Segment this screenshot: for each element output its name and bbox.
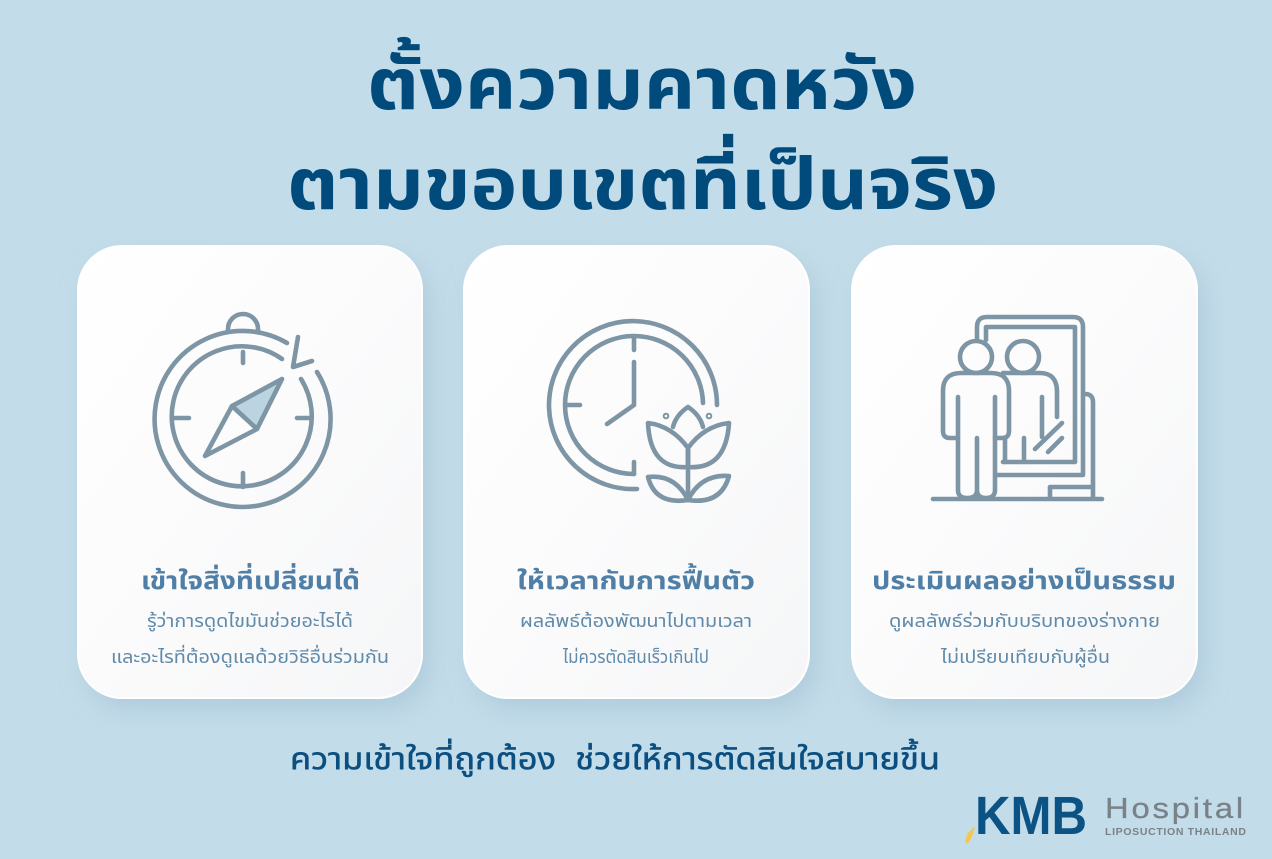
- heading: recovery time: ให้เวลากับการฟื้นตัว: [517, 563, 755, 595]
- title: ตั้งความคาดหวัง: [367, 37, 917, 125]
- heading: understand: เข้าใจสิ่งที่เปลี่ยนได้: [141, 563, 360, 595]
- logo: KMB Hospital: KMB: [975, 786, 1087, 846]
- panel: give recovery time: [464, 246, 809, 698]
- text: recovery body: [520, 611, 752, 667]
- panel: fair evaluation: [852, 246, 1197, 698]
- icon: compass: [155, 314, 331, 507]
- icon: person and mirror: [933, 317, 1102, 499]
- title: ตามขอบเขตที่เป็นจริง: [287, 134, 998, 225]
- title: [287, 37, 998, 225]
- icon: clock and flower: [549, 321, 729, 501]
- panel: understand what can change: [78, 246, 422, 698]
- text: evaluation body: ไม่เปรียบเทียบกับผู้อื่น: [940, 644, 1110, 669]
- footer message: ความเข้าใจที่ถูกต้อง ช่วยให้การตัดสินใจสบายขึ้น: [290, 738, 940, 777]
- text: understand body: รู้ว่าการดูดไขมันช่วยอะไรได้: [147, 611, 353, 633]
- logo: KMB Hospital: Hospital: [1105, 793, 1246, 825]
- logo: KMB Hospital: LIPOSUCTION THAILAND: [1105, 826, 1246, 838]
- text: evaluation body: ดูผลลัพธ์ร่วมกับบริบทของร่างกาย: [889, 611, 1160, 633]
- text: understand body: และอะไรที่ต้องดูแลด้วยวิธีอื่นร่วมกัน: [111, 644, 389, 669]
- text: recovery body: ผลลัพธ์ต้องพัฒนาไปตามเวลา: [520, 611, 752, 631]
- text: recovery body: ไม่ควรตัดสินเร็วเกินไป: [562, 647, 709, 667]
- text: understand body: [111, 611, 389, 669]
- heading: fair evaluation: ประเมินผลอย่างเป็นธรรม: [872, 567, 1176, 595]
- logo: KMB Hospital: [966, 786, 1246, 846]
- text: evaluation body: [889, 611, 1160, 669]
